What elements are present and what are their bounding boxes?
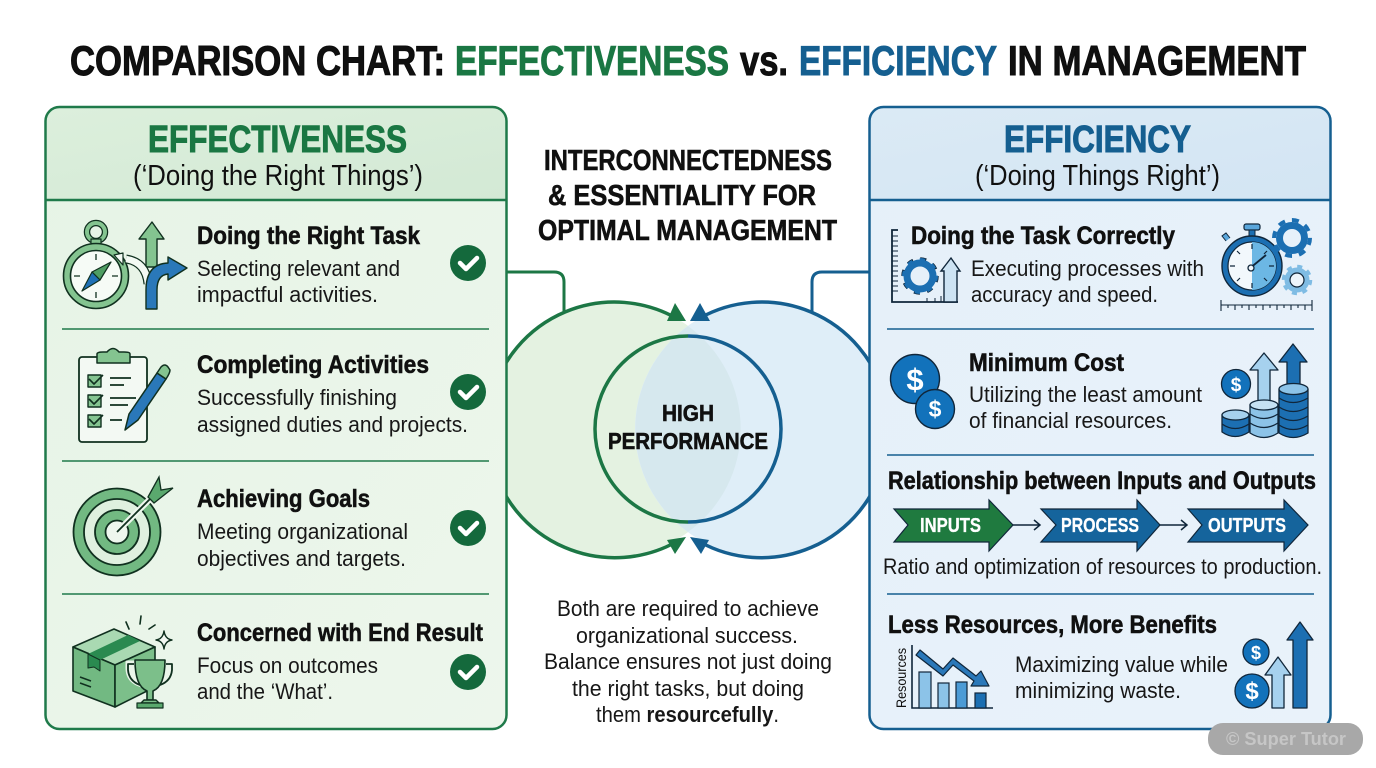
arrow: outputs: OUTPUTS xyxy=(1208,515,1286,537)
icon: check 3 xyxy=(450,510,486,546)
icon: stopwatch and gears xyxy=(1221,220,1312,311)
title: vs. xyxy=(740,37,788,84)
row: completing activities xyxy=(197,351,468,437)
icon: coins and rising arrows: $ xyxy=(1245,678,1259,705)
icon: coin stacks and arrows: $ xyxy=(1231,375,1242,396)
panel heading: effectiveness: EFFECTIVENESS xyxy=(148,119,407,161)
row: completing activities: assigned duties and projects. xyxy=(197,412,468,437)
panel heading: effectiveness: (‘Doing the Right Things’) xyxy=(133,160,423,192)
center summary text xyxy=(544,596,832,727)
row: relationship between inputs and outputs xyxy=(883,467,1322,579)
center summary text: Balance ensures not just doing xyxy=(544,649,832,674)
icon: coins and rising arrows xyxy=(1235,622,1313,708)
icon: dollar coins: $ xyxy=(929,396,942,422)
panel: efficiency xyxy=(870,107,1330,729)
icon: coin stacks and arrows xyxy=(1222,344,1308,438)
icon: dollar coins xyxy=(890,354,954,428)
row: doing the task correctly xyxy=(911,222,1204,307)
row: concerned with end result: and the ‘What’. xyxy=(197,679,333,704)
center heading xyxy=(538,145,837,247)
center summary text: organizational success. xyxy=(576,623,798,648)
row: doing the task correctly: Executing processes with xyxy=(971,256,1204,281)
row: achieving goals: objectives and targets. xyxy=(197,546,406,571)
icon: box and trophy xyxy=(73,616,173,708)
row: doing the right task xyxy=(197,222,420,307)
icon: falling resources chart xyxy=(893,645,993,708)
connector: effectiveness to venn xyxy=(507,272,564,313)
arrow: process xyxy=(1041,500,1160,551)
row: relationship between inputs and outputs: Relationship between Inputs and Outputs xyxy=(888,467,1316,495)
icon: dollar coins: $ xyxy=(906,362,924,397)
panel heading: efficiency: EFFICIENCY xyxy=(1004,119,1191,161)
row: concerned with end result xyxy=(197,619,484,704)
row: less resources, more benefits: Less Resources, More Benefits xyxy=(888,611,1217,639)
title xyxy=(70,37,1306,84)
icon: clipboard and pen xyxy=(79,348,170,442)
venn diagram: high performance xyxy=(487,302,889,558)
icon: coins and rising arrows: $ xyxy=(1251,643,1261,663)
panel heading: efficiency: (‘Doing Things Right’) xyxy=(975,160,1220,192)
row: completing activities: Successfully finishing xyxy=(197,385,397,410)
title: EFFECTIVENESS xyxy=(455,37,729,84)
title: COMPARISON CHART: xyxy=(70,37,445,84)
panel: effectiveness xyxy=(46,107,506,729)
center summary text: Both are required to achieve xyxy=(557,596,819,621)
panel heading: effectiveness xyxy=(133,119,423,192)
row: achieving goals: Achieving Goals xyxy=(197,485,370,513)
row: concerned with end result: Concerned with End Result xyxy=(197,619,484,647)
row: doing the task correctly: accuracy and speed. xyxy=(971,282,1158,307)
row: minimum cost: Utilizing the least amount xyxy=(969,382,1202,407)
arrow: inputs to process xyxy=(1013,520,1040,530)
row: doing the right task: impactful activities. xyxy=(197,282,378,307)
center heading: INTERCONNECTEDNESS xyxy=(544,145,832,177)
row: minimum cost xyxy=(969,349,1202,433)
row: doing the right task: Doing the Right Task xyxy=(197,222,420,250)
icon: compass and forked arrows xyxy=(64,222,187,309)
center heading: & ESSENTIALITY FOR xyxy=(548,180,816,212)
row: relationship between inputs and outputs: Ratio and optimization of resources to production. xyxy=(883,554,1322,579)
arrow: inputs xyxy=(894,500,1013,551)
icon: chart with gear and arrow xyxy=(892,230,960,302)
row: achieving goals: Meeting organizational xyxy=(197,519,408,544)
watermark xyxy=(1208,723,1363,755)
row: less resources, more benefits: Maximizing value while xyxy=(1015,652,1228,677)
watermark: © Super Tutor xyxy=(1226,729,1346,749)
arrow: inputs: INPUTS xyxy=(920,515,981,537)
arrow: outputs xyxy=(1188,500,1308,551)
flow: inputs process outputs xyxy=(894,500,1308,551)
title: IN MANAGEMENT xyxy=(1008,37,1306,84)
connector: efficiency to venn xyxy=(812,272,869,313)
venn diagram: high performance: PERFORMANCE xyxy=(608,428,768,454)
icon: falling resources chart: Resources xyxy=(893,648,909,708)
icon: check 4 xyxy=(450,654,486,690)
row: minimum cost: Minimum Cost xyxy=(969,349,1125,377)
center summary text: them resourcefully. xyxy=(596,702,779,727)
icon: target and arrow xyxy=(74,477,173,576)
row: concerned with end result: Focus on outcomes xyxy=(197,653,378,678)
row: achieving goals xyxy=(197,485,408,571)
venn diagram: high performance: HIGH xyxy=(662,400,714,426)
row: less resources, more benefits xyxy=(888,611,1228,703)
arrow: process: PROCESS xyxy=(1061,515,1139,537)
panel heading: efficiency xyxy=(975,119,1220,192)
icon: check 2 xyxy=(450,374,486,410)
center summary text: the right tasks, but doing xyxy=(572,676,804,701)
arrow: process to outputs xyxy=(1160,520,1187,530)
row: doing the task correctly: Doing the Task Correctly xyxy=(911,222,1175,250)
row: completing activities: Completing Activities xyxy=(197,351,429,379)
icon: check 1 xyxy=(450,245,486,281)
row: minimum cost: of financial resources. xyxy=(969,408,1172,433)
title: EFFICIENCY xyxy=(799,37,997,84)
center heading: OPTIMAL MANAGEMENT xyxy=(538,215,837,247)
row: doing the right task: Selecting relevant and xyxy=(197,256,400,281)
row: less resources, more benefits: minimizing waste. xyxy=(1015,678,1181,703)
